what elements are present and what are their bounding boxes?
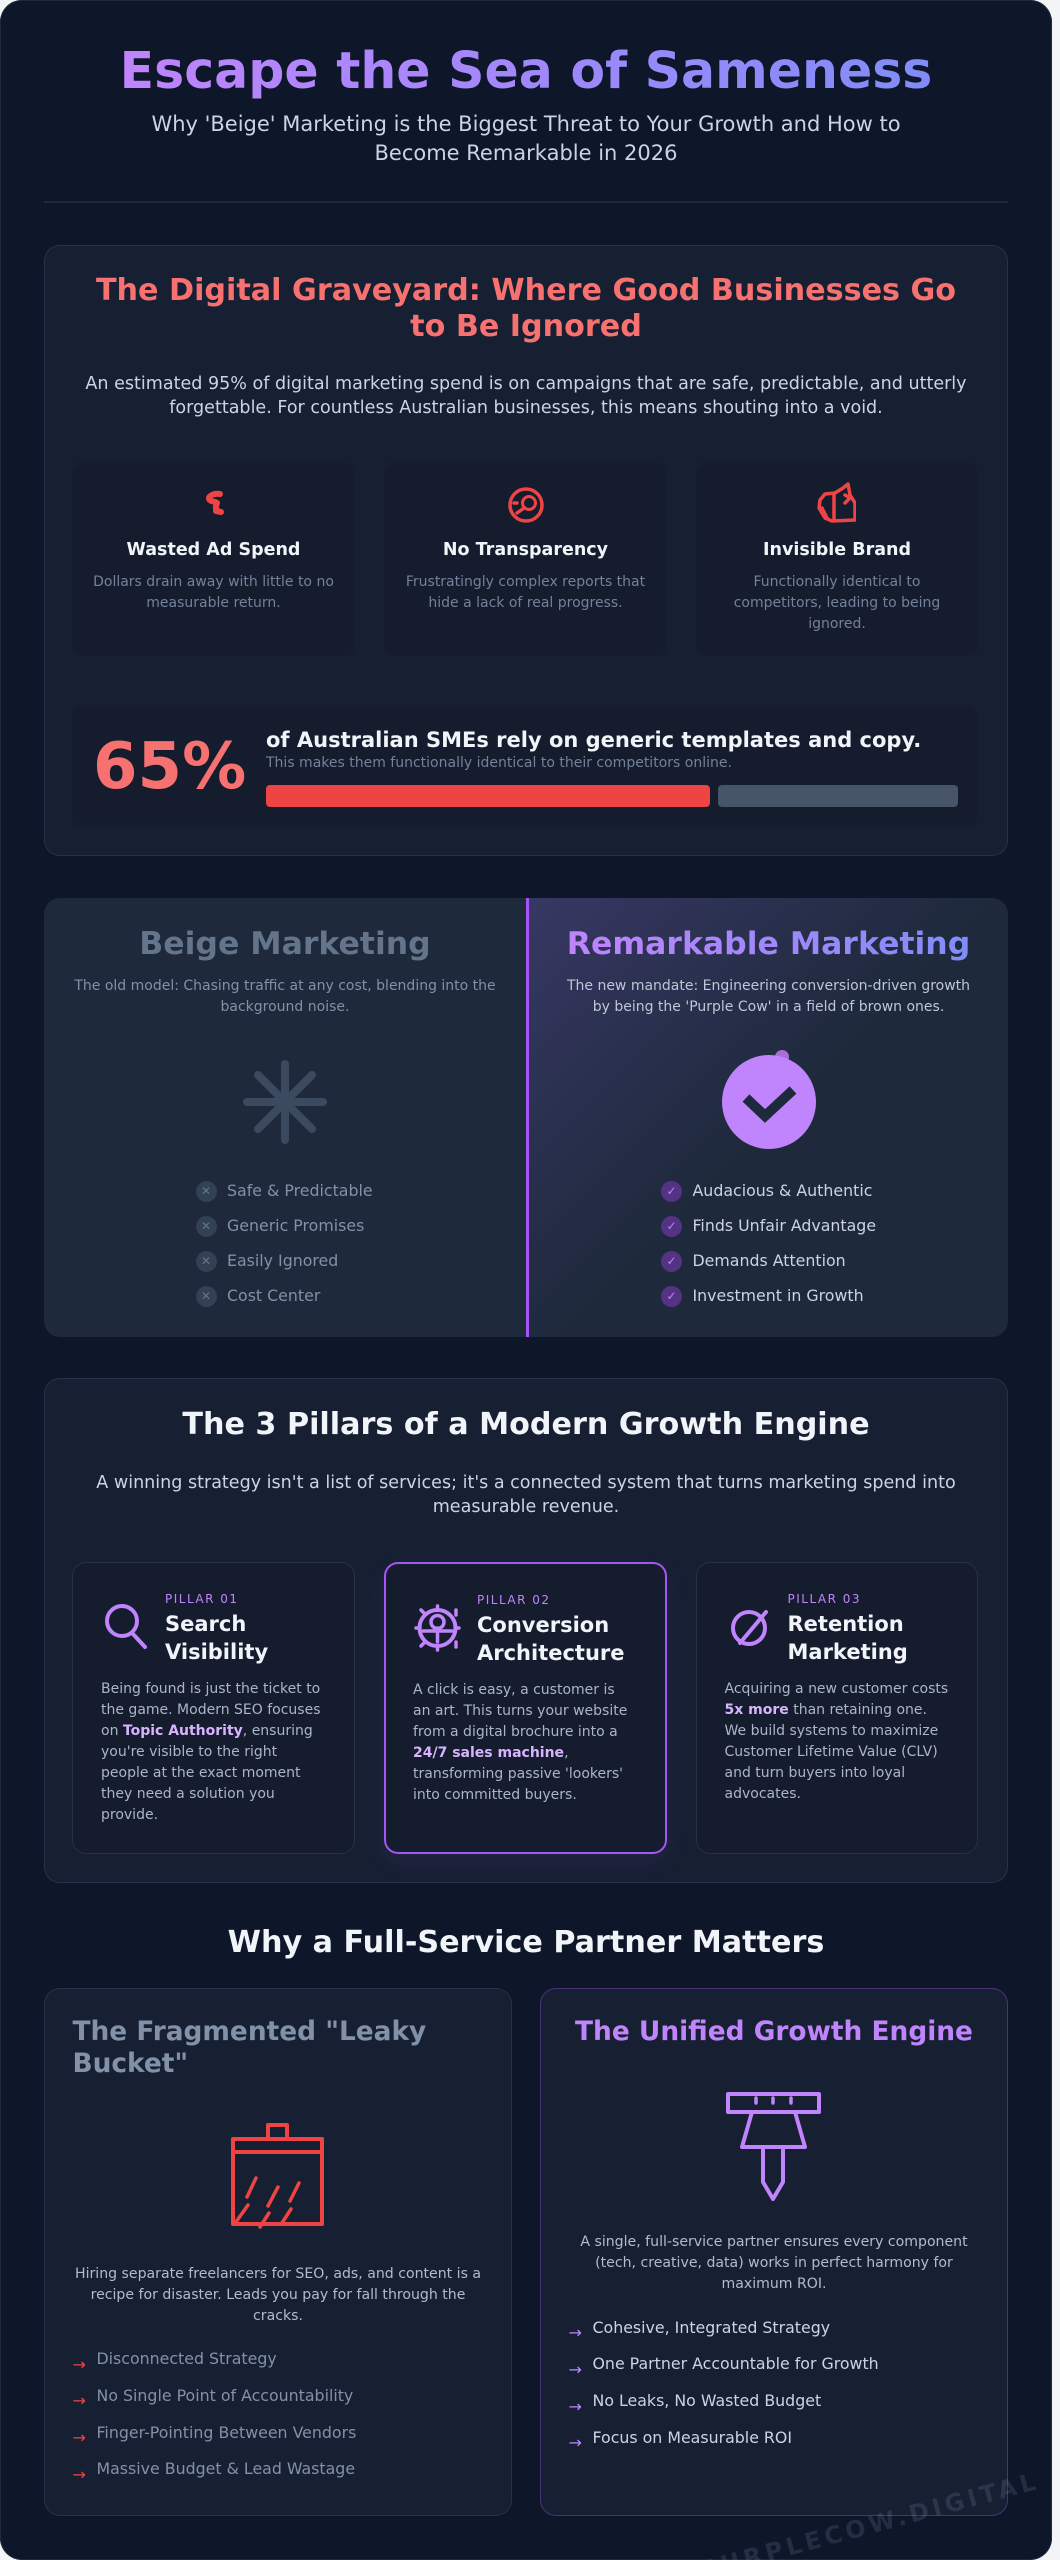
pillar body: Being found is just the ticket to bbox=[101, 1680, 320, 1696]
card title: Invisible Brand bbox=[763, 540, 911, 560]
pillar title: Search bbox=[165, 1612, 246, 1636]
card description: Functionally identical to bbox=[754, 574, 920, 590]
pillars intro: measurable revenue. bbox=[433, 1497, 619, 1517]
card description bbox=[734, 574, 940, 632]
pillar title: Conversion bbox=[477, 1613, 609, 1637]
heading: beige marketing: Beige Marketing bbox=[139, 926, 431, 962]
card title: No Transparency bbox=[443, 540, 608, 560]
item bbox=[72, 2349, 277, 2374]
pillar 01 card bbox=[72, 1562, 355, 1854]
beige description: The old model: Chasing traffic at any cost, blending into the bbox=[74, 978, 496, 994]
remarkable description: by being the 'Purple Cow' in a field of brown ones. bbox=[593, 999, 944, 1015]
icon: asterisk bbox=[243, 1060, 327, 1144]
item: → bbox=[568, 2323, 582, 2342]
icon: search bbox=[105, 1604, 148, 1650]
item: → bbox=[568, 2360, 582, 2379]
item: ✓ bbox=[666, 1184, 677, 1198]
panel: beige marketing bbox=[74, 926, 496, 1307]
item: Audacious & Authentic bbox=[692, 1180, 872, 1200]
pillar body: Acquiring a new customer costs bbox=[724, 1680, 948, 1696]
card title: Wasted Ad Spend bbox=[127, 540, 300, 560]
panel: leaky bucket bbox=[44, 1988, 512, 2516]
pillar label: PILLAR 03 bbox=[788, 1592, 861, 1606]
item bbox=[196, 1286, 320, 1307]
panel: the digital graveyard bbox=[44, 245, 1008, 856]
pillars intro: A winning strategy isn't a list of services; it's a connected system that turns marketing spend into bbox=[96, 1473, 956, 1493]
pillar body: A click is easy, a customer is bbox=[413, 1682, 615, 1698]
item: Disconnected Strategy bbox=[96, 2349, 277, 2368]
unified description: maximum ROI. bbox=[721, 2276, 826, 2292]
stat heading: of Australian SMEs rely on generic templates and copy. bbox=[266, 728, 921, 752]
panel: unified growth engine bbox=[540, 1988, 1008, 2516]
stat description: This makes them functionally identical to their competitors online. bbox=[266, 755, 732, 771]
progress bar filled bbox=[266, 785, 710, 807]
card: no transparency bbox=[384, 463, 667, 656]
heading: leaky bucket bbox=[72, 2016, 426, 2079]
item: ✕ bbox=[201, 1219, 211, 1233]
item bbox=[568, 2427, 868, 2449]
unified description: A single, full-service partner ensures every component bbox=[580, 2234, 968, 2250]
item: → bbox=[72, 2354, 86, 2374]
item bbox=[568, 2390, 868, 2412]
pillar body: you're visible to the right bbox=[101, 1744, 277, 1760]
pillar 03 card bbox=[696, 1562, 978, 1854]
pillar body: on Topic Authority, ensuring bbox=[101, 1722, 313, 1738]
item: Finger-Pointing Between Vendors bbox=[96, 2423, 356, 2442]
unified description bbox=[540, 2232, 1008, 2295]
heading: remarkable marketing: Remarkable Marketing bbox=[567, 926, 970, 962]
item: ✕ bbox=[201, 1254, 211, 1268]
card description: hide a lack of real progress. bbox=[428, 594, 623, 610]
pillar label: PILLAR 02 bbox=[477, 1592, 551, 1606]
item: Demands Attention bbox=[692, 1251, 846, 1270]
remarkable description: The new mandate: Engineering conversion-driven growth bbox=[567, 978, 970, 994]
subtitle: Why 'Beige' Marketing is the Biggest Threat to Your Growth and How to bbox=[151, 112, 901, 136]
pillar label: PILLAR 01 bbox=[165, 1592, 239, 1606]
item: ✓ bbox=[666, 1219, 677, 1233]
item: Safe & Predictable bbox=[227, 1180, 373, 1200]
item: Easily Ignored bbox=[227, 1251, 338, 1270]
pillar body: the game. Modern SEO focuses bbox=[101, 1702, 320, 1718]
pillar body bbox=[101, 1680, 320, 1822]
item: → bbox=[568, 2397, 582, 2416]
heading: digital graveyard: The Digital Graveyard: Where Good Businesses Go bbox=[96, 273, 956, 308]
card description: Frustratingly complex reports that bbox=[406, 574, 645, 590]
pillar body: transforming passive 'lookers' bbox=[413, 1766, 623, 1782]
heading: leaky bucket: Bucket" bbox=[72, 2048, 188, 2079]
pillar body: We build systems to maximize bbox=[724, 1722, 938, 1738]
item: Finds Unfair Advantage bbox=[692, 1216, 876, 1235]
pillar body: and turn buyers into loyal bbox=[724, 1764, 905, 1780]
card: invisible brand bbox=[696, 463, 978, 656]
pillar body: into committed buyers. bbox=[413, 1786, 577, 1802]
heading: full-service partner: Why a Full-Service Partner Matters bbox=[228, 1925, 824, 1960]
pillar body: an art. This turns your website bbox=[413, 1702, 627, 1718]
card description: measurable return. bbox=[146, 594, 281, 610]
heading: digital graveyard: to Be Ignored bbox=[410, 309, 642, 344]
icon: leaky bucket bbox=[231, 2123, 324, 2229]
pillar title: Retention bbox=[788, 1612, 904, 1636]
item: Focus on Measurable ROI bbox=[592, 2428, 792, 2447]
pillar title bbox=[477, 1613, 625, 1665]
leaky bucket description: cracks. bbox=[253, 2308, 303, 2324]
card description: competitors, leading to being bbox=[734, 594, 940, 610]
icon: no transparency bbox=[508, 487, 544, 523]
item: ✕ bbox=[201, 1184, 211, 1198]
stat box: 65 percent bbox=[72, 705, 977, 827]
item: Investment in Growth bbox=[692, 1286, 864, 1305]
intro text: An estimated 95% of digital marketing spend is on campaigns that are safe, predictable, and utterly bbox=[85, 374, 967, 394]
item: ✓ bbox=[666, 1289, 677, 1303]
pillar title bbox=[165, 1612, 268, 1664]
beige description bbox=[74, 978, 496, 1015]
card description bbox=[406, 574, 645, 610]
item: No Leaks, No Wasted Budget bbox=[592, 2391, 821, 2410]
pillar title: Architecture bbox=[477, 1641, 625, 1665]
icon: conversion bbox=[414, 1604, 461, 1652]
item: → bbox=[72, 2391, 86, 2410]
panel: three pillars bbox=[44, 1378, 1008, 1883]
heading: three pillars: The 3 Pillars of a Modern Growth Engine bbox=[182, 1407, 870, 1442]
panel: remarkable marketing bbox=[526, 898, 1008, 1337]
progress bar remainder bbox=[718, 785, 958, 807]
card: wasted ad spend bbox=[72, 463, 355, 656]
pillar body: Customer Lifetime Value (CLV) bbox=[724, 1744, 938, 1760]
leaky bucket description: Hiring separate freelancers for SEO, ads, and content is a bbox=[75, 2266, 481, 2282]
icon: retention bbox=[731, 1610, 768, 1646]
item: Generic Promises bbox=[227, 1216, 364, 1235]
item: → bbox=[72, 2428, 86, 2447]
item: → bbox=[72, 2465, 86, 2484]
intro text: forgettable. For countless Australian businesses, this means shouting into a void. bbox=[169, 398, 883, 418]
pillar body bbox=[413, 1682, 627, 1802]
item bbox=[568, 2316, 868, 2338]
pillar title: Visibility bbox=[165, 1640, 268, 1664]
pillar body: provide. bbox=[101, 1806, 158, 1822]
pillar title: Marketing bbox=[788, 1640, 908, 1664]
heading: unified growth engine: The Unified Growth Engine bbox=[575, 2016, 973, 2047]
beige description: background noise. bbox=[221, 999, 349, 1015]
pillar body: people at the exact moment bbox=[101, 1764, 301, 1780]
intro text bbox=[85, 374, 967, 418]
pillar body bbox=[724, 1680, 948, 1802]
card description bbox=[93, 574, 334, 610]
pillar body: 24/7 sales machine, bbox=[413, 1744, 569, 1760]
item: ✓ bbox=[666, 1254, 677, 1268]
heading: digital graveyard bbox=[96, 273, 956, 344]
pillar title bbox=[788, 1612, 908, 1664]
pillars intro bbox=[96, 1473, 956, 1517]
heading: leaky bucket: The Fragmented "Leaky bbox=[72, 2016, 426, 2047]
unified description: (tech, creative, data) works in perfect harmony for bbox=[595, 2255, 953, 2271]
title: Escape the Sea of Sameness bbox=[120, 40, 932, 100]
pillar body: advocates. bbox=[724, 1786, 801, 1802]
card description: ignored. bbox=[808, 616, 866, 632]
item: One Partner Accountable for Growth bbox=[592, 2354, 879, 2373]
subtitle bbox=[151, 112, 901, 165]
item: Massive Budget & Lead Wastage bbox=[96, 2459, 355, 2478]
item: → bbox=[568, 2433, 582, 2452]
card description: Dollars drain away with little to no bbox=[93, 574, 334, 590]
pillar body: 5x more than retaining one. bbox=[724, 1702, 927, 1718]
icon: invisible brand bbox=[817, 482, 856, 523]
pillar body: they need a solution you bbox=[101, 1786, 275, 1802]
remarkable description bbox=[566, 978, 970, 1015]
item: Cohesive, Integrated Strategy bbox=[592, 2318, 830, 2336]
icon: pin bbox=[722, 2088, 826, 2204]
icon: wasted spend bbox=[206, 490, 224, 515]
subtitle: Become Remarkable in 2026 bbox=[374, 141, 677, 165]
big number: 65% bbox=[93, 730, 246, 804]
item: ✕ bbox=[201, 1289, 211, 1303]
item: Cost Center bbox=[227, 1286, 320, 1305]
panel: comparison beige vs remarkable bbox=[44, 898, 1008, 1337]
pillar 02 card bbox=[384, 1562, 667, 1854]
pillar body: from a digital brochure into a bbox=[413, 1724, 618, 1740]
item: No Single Point of Accountability bbox=[96, 2386, 353, 2405]
icon: purple cow check bbox=[722, 1050, 816, 1149]
leaky bucket description: recipe for disaster. Leads you pay for fall through the bbox=[91, 2287, 465, 2303]
leaky bucket description bbox=[75, 2266, 481, 2324]
